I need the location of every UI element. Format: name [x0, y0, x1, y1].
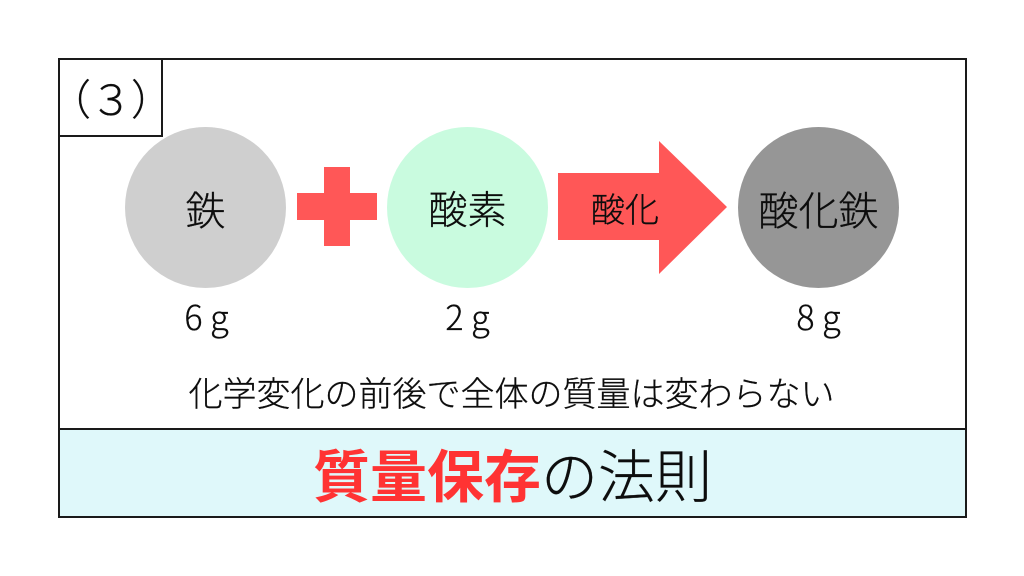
banner: law of conservation of mass: の法則: [541, 432, 712, 514]
circle: iron: 鉄: [186, 178, 226, 236]
label: problem number: （３）: [49, 66, 172, 128]
circle: iron oxide: 酸化鉄: [758, 178, 878, 236]
mass: iron oxide: 8 g: [796, 290, 841, 340]
panel: main frame: [58, 58, 967, 518]
text: explanation: 化学変化の前後で全体の質量は変わらない: [188, 366, 834, 416]
circle: oxygen: [387, 127, 548, 288]
circle: iron: [125, 127, 286, 288]
banner: law of conservation of mass: 質量保存: [313, 432, 541, 514]
mass: iron: 6 g: [184, 290, 229, 340]
banner: law of conservation of mass: [58, 428, 967, 518]
arrow: oxidation: [558, 141, 727, 274]
circle: iron oxide: [738, 127, 899, 288]
mass: oxygen: 2 g: [445, 290, 490, 340]
arrow label: 酸化: [591, 182, 659, 232]
label: problem number: [58, 58, 163, 137]
circle: oxygen: 酸素: [428, 180, 506, 236]
icon: plus sign: [297, 167, 377, 246]
